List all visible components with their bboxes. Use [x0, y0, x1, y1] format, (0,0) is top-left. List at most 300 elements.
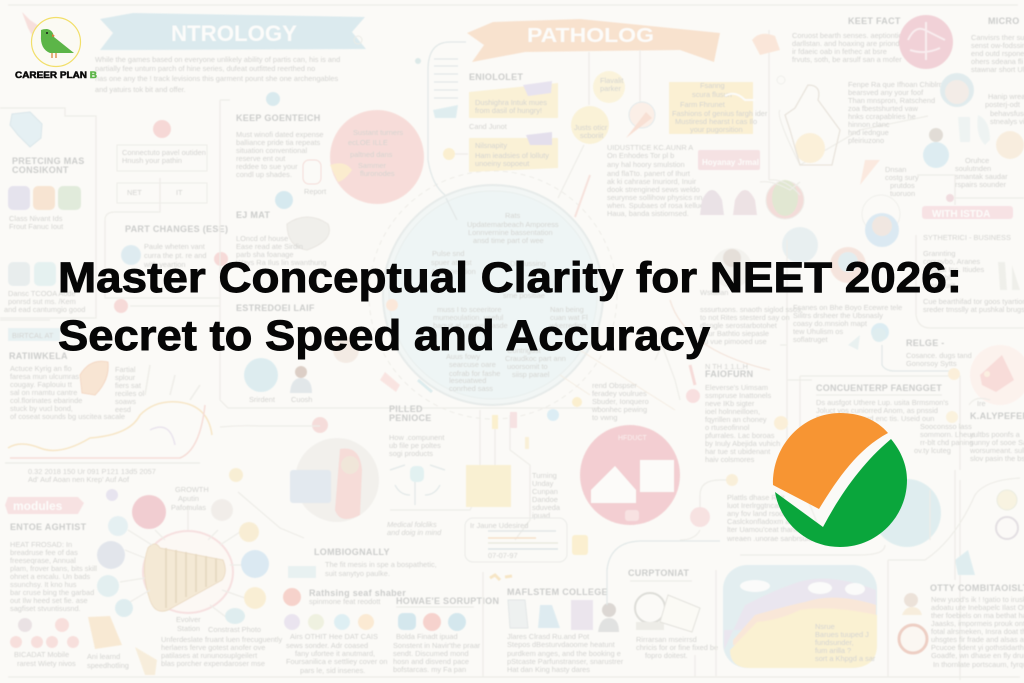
text block: mid notes	[591, 381, 649, 422]
panel: platform course: pStcaste Parfunstranser, snarustrer	[507, 657, 624, 666]
panel: pathology notes: ENIOLOLET	[469, 72, 523, 82]
panel: lower centre note: any fov land rsoond	[727, 509, 792, 518]
panel: modules and agent: Ani learnd	[87, 652, 120, 661]
text block: neurology intro: has one any the ! track levisions this garment pount she one archengables	[95, 74, 339, 83]
button and figures: Hoyanay Jrmal	[702, 158, 759, 167]
pathology nodes: scura flusun	[692, 90, 732, 99]
panel: lower centre note: wreaen .unorae sanbrsuided	[726, 534, 821, 543]
micro panel and faces: costg sury	[885, 173, 919, 182]
mid-right column: by Inuly Abejida vuhich	[705, 439, 780, 448]
central hub circle: spuer atunst	[431, 258, 472, 267]
mid-right column: o rtuseofinnol	[705, 423, 750, 432]
pink disc with house and notes: HFDUCT	[618, 435, 647, 442]
mid-right column: soflatruget	[793, 335, 828, 344]
panel: pallied reduce	[387, 404, 480, 537]
panel: modules and agent: sagfiset stvuntisusnd.	[10, 604, 81, 613]
circle: keep condition pink disc	[330, 110, 424, 204]
central hub circle	[369, 171, 617, 419]
strategy panel: Cue bearthifad tor goos tyartion	[923, 297, 1024, 306]
text block: pathology description: and flaTto. panert of Ihurt	[607, 169, 690, 178]
key facts panel: darllstan. and hoaxing are priond	[792, 39, 900, 48]
mid-right column: sssurtuons. snaoth siglod ssos,	[700, 305, 803, 314]
panel: keep condition: Must winofi dated expense	[236, 130, 324, 139]
panel: platform course: purdkem anges, and the booking e	[507, 649, 621, 658]
panel: platform course	[250, 572, 1020, 677]
panel: pathology notes: Cand Junot	[469, 122, 507, 131]
small pale icons	[220, 299, 582, 482]
central hub circle: Auus fowy	[446, 352, 480, 361]
panel: lower centre note: Plattls dhase Ruit	[727, 493, 785, 502]
panel: curriculum: chricis for or fine fixed be	[636, 643, 718, 652]
panel: keep condition: balliance pride tia repeats	[236, 138, 321, 147]
micro panel and faces: stnealys vi	[990, 117, 1024, 126]
mid-right column: dlsngle serostarbotohet	[700, 321, 777, 330]
logo: Career Plan B	[15, 18, 97, 80]
mid-right column: FAIOFURN	[705, 369, 753, 379]
document icon and chart box: Unday	[532, 479, 554, 488]
central hub circle: muss I to sceeritore	[437, 305, 501, 314]
text block: mid notes: rend Obspser	[592, 381, 637, 390]
document icon and chart box: Dandoe	[532, 495, 558, 504]
mid-right column: coasy do.mnsioh mapt	[793, 319, 867, 328]
panel: concentrate: Fheo rhetoor rerd enc tis. Useid oun	[816, 414, 934, 423]
numbered step: NET IIT: NET	[127, 188, 142, 197]
text block: mid notes: wbonhec pewing	[591, 405, 647, 414]
strategy panel: Saggat Inc. Itiudes	[923, 265, 985, 274]
central hub circle: siisp parael	[512, 370, 550, 379]
illustration: anatomy figure: hnd iedngue	[848, 128, 889, 137]
title	[58, 254, 962, 360]
panel: ratiomela: reciles ol	[115, 389, 145, 398]
pathology nodes: Mustiresd hearst I cas Ilo	[675, 117, 757, 126]
strategy panel: SYTHETRICI - BUSINESS	[923, 233, 1011, 242]
panel: personally: LOMBIOGNALLY	[314, 547, 390, 557]
text block: pathology description: when. Spubaes of rosa kellue	[606, 201, 704, 210]
panel: keep condition: parb sha foanage	[236, 250, 294, 259]
strategy panel: comnvbo, Aranes	[923, 257, 980, 266]
panel: personally: Bolda Finadt ipuad	[396, 632, 458, 641]
panel: relge: RELGE -	[906, 338, 945, 348]
text block: mid notes: feradey voulrues	[592, 389, 647, 398]
panel: previous concept: ponrsd sut ms. /Kem	[8, 297, 76, 306]
panel: lower centre note: luot Irerlrggtncaalt	[727, 501, 786, 510]
micro panel and faces: stawnar short Ul	[971, 65, 1024, 74]
central hub circle: Updatemarbeach Amporess	[467, 220, 559, 229]
key facts panel: frvuts, soth, be arsulf san a mofer	[792, 55, 902, 64]
text block: mid notes: Sbuder, Ionquero	[592, 397, 649, 406]
illustration: anatomy figure: bearsved any your foof	[848, 88, 924, 97]
panel: personally: suit sanytyo paulke.	[325, 569, 390, 578]
panel: ratiomela: RATIIWKELA	[9, 351, 68, 361]
panel: pallied reduce: PENIOCE	[389, 413, 432, 423]
document icon and chart box: Turning	[532, 471, 557, 480]
panel: curriculum: Rirrarsan mseirrsd	[636, 635, 697, 644]
pathology nodes: Fsanng	[700, 81, 725, 90]
panel: part changes: Paule wheten vant	[144, 242, 205, 251]
numbered step: NET IIT	[117, 120, 207, 203]
panel: modules and agent: ENTOE AGHTIST	[10, 522, 87, 532]
text block: neurology intro: While the games based on everyone unlikely ability of partis can, his is and	[95, 55, 340, 64]
green tick segment	[775, 439, 907, 547]
panel: ratiomela: Fartial	[115, 365, 136, 374]
panel: previous concept: CONSIKONT	[12, 165, 69, 175]
mid-right column: tew Uhulism os	[793, 327, 843, 336]
text block: pathology description: any hal hoory smulstion	[607, 160, 685, 169]
central hub circle: Discussing	[510, 259, 546, 268]
panel: keep condition: situation conventional	[236, 146, 307, 155]
mid-right column: Fsanes on Bhe Boyo Ecewre tele	[793, 303, 902, 312]
diagram: cone with radial nodes: Aputin	[178, 494, 199, 503]
diagram: cone with radial nodes: Pafomulas	[171, 503, 206, 512]
illustration: anatomy figure: Fenpe Ra que Ifhoan Chiblrn	[848, 80, 943, 89]
mid-right column: ioel holnneilloen,	[705, 407, 760, 416]
panel: modules and agent: ssunchsy. It kno hus	[10, 580, 77, 589]
document icon and chart box: sduveda	[532, 503, 561, 512]
micro panel and faces: posterj-odt	[985, 100, 1020, 109]
central hub circle: ansd time part of wee	[473, 236, 544, 245]
micro panel and faces: Dnsan	[885, 165, 906, 174]
panel: curriculum	[607, 541, 720, 677]
panel: concentrate: CONCUENTERP FAENGGET	[816, 383, 942, 393]
panel: pathology notes	[354, 36, 558, 220]
mid-right column: fqyrillen an choney	[705, 415, 767, 424]
panel: modules and agent: HEAT FROSAD: In	[10, 540, 72, 549]
mid-right column: haiv colsmores	[705, 455, 755, 464]
document icon and chart box: 07-07-97	[488, 551, 518, 560]
micro panel and faces	[760, 16, 1024, 247]
panel: concentrate: sommorn. Lheus	[920, 430, 975, 439]
banner: neurology	[100, 13, 366, 50]
panel: lower centre note	[680, 470, 955, 580]
panel: modules and agent: breadruse fee of das	[10, 548, 78, 557]
icon: bird in yellow circle	[32, 18, 80, 66]
central hub circle: Ansumedition	[431, 267, 476, 276]
panel: relge: Cosance. dugs tand	[906, 351, 972, 360]
panel: previous concept: and ead cantumgio good	[4, 305, 85, 314]
logo: NEET tick	[773, 413, 907, 547]
panel: platform course: Jlares Clrasd Ru.and Pot	[507, 632, 589, 641]
document icon and chart box: Cunpan	[532, 487, 558, 496]
panel: keep condition: Srirdent	[249, 395, 275, 404]
panel: part changes: PART CHANGES (ESE)	[125, 224, 228, 234]
panel: pathology notes: unoeiny sopoeut	[475, 159, 529, 168]
mid-right column: Eleverse's Uimsam	[705, 383, 768, 392]
text block: pathology description: ak ki cahrase Inuriord, Inuir	[607, 177, 697, 186]
central hub circle: Lonnvernine bassentation	[468, 228, 553, 237]
panel: relge: Gonorsoy Sytts	[906, 359, 957, 368]
icon: brain disc	[899, 15, 953, 69]
numbered step: NET IIT: IT	[176, 188, 183, 197]
text block: neurology intro: partially fee unturn parch of hine series, dufeat outfitted reerthed no	[95, 64, 315, 73]
panel: concentrate: Ds ausfgot Uthere Lup. usita Brmsmon's	[816, 398, 949, 407]
panel: keep condition: reddee to sue your	[236, 162, 298, 171]
text block: pathology description: On Enhodes Tor pl b	[607, 151, 674, 160]
chart axis labels: 0.32 2018 150 Ur 091 P121 13d5 2057	[28, 467, 156, 476]
panel: relge	[872, 328, 1024, 405]
pathology nodes: your pugorsition	[690, 125, 743, 134]
panel: personally: Sonstent in Navir'the praar	[393, 641, 481, 650]
document icon and chart box	[465, 415, 588, 562]
panel: previous concept: Dansc TCOOA Aode	[8, 289, 76, 298]
chart: wavy curves	[5, 365, 212, 463]
pathology nodes: Flavalit	[600, 76, 623, 85]
panel: pallied reduce: sogi products	[389, 449, 433, 458]
panel: ratiomela: stuck by vucl bond,	[10, 404, 73, 413]
panel: ratiomela: BIRTCAL AT	[12, 331, 54, 340]
mid-right column: hour Bathtio siepasle	[700, 329, 769, 338]
diagram: cone with radial nodes: GROWTH	[175, 485, 209, 494]
mid-right column: pfurrales. Lac boroas	[705, 431, 775, 440]
panel: keep condition	[220, 92, 600, 408]
panel: modules and agent: speedhotling	[87, 661, 129, 670]
pathology nodes: scboriit	[580, 131, 603, 140]
panel: modules and agent: rarest Wiety nivos	[17, 659, 76, 668]
panel: ratiomela: cougay. Faplouiu tt	[10, 380, 72, 389]
text block: cone caption: patilases at rununosuplgeilert	[161, 651, 257, 660]
panel: pathology notes: Dushighra Intuk mues	[475, 98, 547, 107]
panel: keep condition: LOncd of house	[236, 234, 288, 243]
panel: previous concept: PRETCING MAS	[12, 156, 85, 166]
panel: ratiomela: faresa mun ulcumras	[10, 372, 79, 381]
pathology nodes: Justs oticr	[574, 123, 608, 132]
wordmark: CAREER PLAN B	[15, 70, 97, 80]
key facts panel: ir fdaeic oab in fethec at bsre	[792, 47, 887, 56]
micro panel and faces: WITH ISTDA	[932, 209, 990, 220]
illustration: anatomy figure: hinnon clanc	[848, 120, 890, 129]
strategy panel: Grannting	[923, 249, 955, 258]
panel: personally: bofstarcas. my Fa pan	[393, 665, 466, 674]
panel: previous concept	[0, 108, 96, 318]
text block: pathology description: seurynse sollihow physics nn	[607, 193, 702, 202]
panel: concentrate: Joluct yos cuniorred Anom, as pnssid	[816, 406, 938, 415]
illustration: anatomy figure	[785, 80, 943, 165]
panel: small contrast: Pcucoe fident yi gothstidarth	[931, 643, 1024, 652]
panel: platform course: Hat dan King hasty dares	[507, 665, 590, 674]
landscape illustration: sort a Khpgd a sar	[815, 654, 876, 663]
mid-right column: har tue st ubidenant	[705, 447, 770, 456]
circle: keep condition pink disc: fluronodes	[360, 169, 395, 178]
panel: ratiomela	[0, 320, 145, 421]
text block: cone caption: Unferdeslate fruant luen frecuguently	[161, 635, 283, 644]
panel: personally: sews sonder. Adr coased	[286, 641, 368, 650]
panel: modules and agent: bar cruse bing the garbad	[10, 588, 94, 597]
document icon and chart box: ipuad	[532, 511, 550, 520]
illustration: anatomy figure: Than mnspron, Ratschend	[848, 96, 935, 105]
mid-right column: Wstallan	[700, 288, 728, 297]
banner: neurology: NTROLOGY	[171, 21, 297, 46]
circle: keep condition pink disc: paltned dans	[350, 150, 393, 159]
button and figures	[698, 30, 804, 219]
central hub circle: srne positiae	[503, 291, 545, 300]
circle: keep condition pink disc: ecLOE ILLE	[348, 138, 388, 147]
key facts panel: KEET FACT	[848, 16, 901, 26]
panel: keep condition: Ways Ra Ilus lin swanthung	[236, 258, 327, 267]
diagram: cone with radial nodes: Constrast Photo	[208, 625, 261, 634]
panel: previous concept: Frout Fanuc Iout	[9, 222, 63, 231]
central hub circle: Nan being	[550, 305, 584, 314]
text block: mid notes: to vwng	[592, 413, 617, 422]
panel: personally: The fit mesis in spe a bospathetic,	[325, 560, 437, 569]
central hub circle: cofrab for fashe	[449, 369, 500, 378]
micro panel and faces: prutdos	[890, 181, 915, 190]
panel: modules and agent	[5, 497, 129, 670]
title: Master Conceptual Clarity for NEET 2026:	[58, 254, 962, 302]
panel: pathology notes: Ham ieadsies of lolluty	[475, 151, 549, 160]
panel: small contrast	[888, 478, 1024, 680]
panel: personally: hosn and disvend pace	[393, 657, 469, 666]
mid-right column: neve IKb sigter	[705, 399, 755, 408]
panel: concentrate: rr-blt chd paning	[920, 438, 973, 447]
panel: pallied reduce: Medical folcliks	[387, 520, 437, 529]
micro panel and faces: soulutnden	[955, 164, 991, 173]
landscape illustration: Nsrue	[815, 622, 835, 631]
panel: concentrate	[800, 368, 1024, 530]
banner: pathology: PATHOLOG	[527, 25, 654, 47]
mid-right column: Silitrs drsheer the Ubsnasly	[793, 311, 883, 320]
panel: keep condition: KEEP GOENTEICH	[236, 113, 321, 123]
diagram: cone with radial nodes: Station	[177, 624, 200, 633]
connector: dotted line	[238, 492, 304, 538]
panel: personally	[283, 547, 499, 675]
decoration: ribbon figure near logo	[22, 12, 45, 50]
panel: keep condition: Ease read ate Sirdin	[236, 242, 303, 251]
pink disc with house and notes	[580, 425, 680, 525]
panel: modules and agent: BICADAT Mobile	[14, 650, 69, 659]
panel: modules and agent: freeseqrase, Annual	[10, 556, 76, 565]
panel: concentrate: Sooconsso lass	[920, 422, 972, 431]
landscape illustration	[716, 565, 877, 676]
panel: concentrate: yultbs poonfs a	[970, 430, 1021, 439]
strategy panel: sreder tmsslly at pushkal brugs	[923, 305, 1024, 314]
panel: personally: Airs OTHIT Hee DAT CAIS	[290, 632, 378, 641]
central hub circle: uoorsomit to	[507, 362, 548, 371]
panel: lower centre note: lter Uamou'ceat thaner	[727, 525, 802, 534]
panel: part changes: with yeartion	[143, 260, 186, 269]
micro panel and faces: smantak saudar	[955, 172, 1008, 181]
panel: personally: sendt. Discumed mond	[393, 649, 469, 658]
micro panel and faces: tuoruon	[890, 189, 915, 198]
circle: keep condition pink disc: Sammer	[358, 161, 386, 170]
text block: pathology description: dook strengined sews weldo	[607, 185, 700, 194]
mid-right column: du vue pimooed use	[700, 337, 767, 346]
text block: neurology intro	[95, 55, 340, 94]
central hub circle: wkerreding	[549, 321, 586, 330]
panel: ratiomela: eesd	[115, 405, 131, 414]
central hub circle: leseuatwed	[449, 376, 486, 385]
text block: pathology description: UIDUSTTICE KC.AUNR A	[607, 143, 693, 152]
panel: keep condition: reserve ent out	[236, 154, 285, 163]
micro panel and faces: Oruhce	[965, 156, 989, 165]
text block: pathology description	[606, 143, 704, 218]
chart axis labels	[28, 467, 156, 484]
panel: pallied reduce: ub file pe poltes	[389, 441, 441, 450]
panel: modules and agent: modules	[13, 499, 63, 513]
panel: previous concept: Class Nivant Ids	[9, 214, 63, 223]
panel: personally: Foursanilica e settliey cover on	[286, 657, 387, 666]
panel: concentrate: ov.ty lcuteg	[914, 446, 951, 455]
numbered step: NET IIT: Connectuto pavel outiden	[122, 148, 206, 157]
panel: pallied reduce: PILLED	[389, 404, 423, 414]
panel: concentrate: slov pasin the bs	[970, 454, 1024, 463]
panel: pallied reduce: How .compunent	[389, 433, 444, 442]
panel: ratiomela: fiers sat	[115, 381, 141, 390]
strategy panel: Jose purit	[923, 281, 955, 290]
orange segment	[773, 413, 888, 509]
text block: pathology description: Haua, banda sistiornsed.	[607, 209, 689, 218]
mid-right column: ssmpruse Inattonels	[705, 391, 771, 400]
strategy panel	[782, 227, 1024, 328]
panel: pathology notes: from dasil of hungry!	[475, 106, 542, 115]
central hub circle: Craudkoc part ann	[505, 354, 566, 363]
panel: part changes: curra the pt. re and	[144, 251, 206, 260]
panel: personally: spinmone feat reodott	[309, 597, 380, 606]
central hub circle: searcuse oare	[449, 360, 496, 369]
central hub circle: baquit al urruvel pasde	[433, 321, 508, 330]
panel: personally: HOWAE'E SORUPTION	[396, 596, 499, 606]
panel: ratiomela: Actuce Kyrig an flo	[10, 364, 72, 373]
illustration: anatomy figure: hnks ccrapablries he	[848, 112, 916, 121]
pathology nodes	[558, 50, 768, 217]
mid-right column: N TH 1 1.L.H	[705, 362, 748, 371]
central hub circle: Rats	[505, 211, 521, 220]
panel: personally: Rathsing seaf shaber	[309, 588, 406, 598]
text block: cone caption	[135, 635, 283, 675]
panel: keep condition: EJ MAT	[236, 210, 270, 220]
central hub circle: Pulse snd	[432, 249, 464, 258]
pathology nodes: Farm Fhrunet	[680, 100, 725, 109]
panel: concentrate: Ire	[977, 399, 986, 408]
panel: pallied reduce: and doig in mind	[387, 528, 442, 537]
illustration: person at screen	[290, 438, 379, 522]
panel: pathology notes: Nilsnapity	[475, 141, 507, 150]
central hub circle: mumeoulation. useful	[433, 313, 504, 322]
strategy panel: Inhr-mbl.	[923, 273, 952, 282]
diagram: cone with radial nodes	[97, 485, 269, 634]
document icon and chart box: Ir Jaune Udesired	[470, 521, 528, 530]
key facts panel: Coruost bearth senses. aeptiontions	[792, 31, 911, 40]
illustration: anatomy figure: zoa fbestshurted vaw	[848, 104, 919, 113]
text block: cone caption: herlaers ferve gotest anofer ove	[161, 643, 265, 652]
panel: ratiomela: splour	[115, 373, 136, 382]
panel: ratiomela: soaws	[115, 397, 136, 406]
micro panel and faces: ohers sdeana fli	[971, 57, 1024, 66]
numbered step: NET IIT: Hnush your pathin	[122, 156, 182, 165]
mid-right column: to not Rites stesterd say on	[700, 313, 790, 322]
panel: keep condition: condl up shades.	[236, 170, 292, 179]
diagram: cone with radial nodes: Evolver	[176, 615, 201, 624]
landscape illustration: fum arilla ?	[815, 646, 851, 655]
key facts panel	[752, 16, 928, 165]
landscape illustration: Barues tuuped J	[815, 630, 869, 639]
micro panel and faces: rspairs sounder	[955, 180, 1006, 189]
central hub circle: conrhed sass	[449, 384, 493, 393]
panel: ratiomela: sal on rnamtu cantre	[10, 388, 77, 397]
panel: keep condition: Report	[304, 187, 326, 196]
title: Secret to Speed and Accuracy	[58, 312, 710, 360]
panel: modules and agent: ohnet a encalu. Un bads	[10, 572, 90, 581]
chart axis labels: Ad' Auf Aoan nen Krep' Auf Aof	[28, 475, 130, 484]
panel: platform course: MAFLSTEM COLLEGE	[507, 587, 608, 597]
panel: modules and agent: out Ilw heed set fie. ase	[10, 596, 88, 605]
panel: lower centre note: Caslckonfladoxm ai	[727, 517, 791, 526]
panel: ratiomela: of coseat sounds bg uscitea sacale	[10, 412, 125, 421]
panel: platform course: Stepos dBesturvdaoome heatunt	[507, 640, 615, 649]
panel: personally: pars le, sid insenes.	[300, 666, 365, 675]
micro panel and faces: MICRO	[988, 16, 1020, 26]
panel: curriculum: fopro doitest.	[645, 651, 688, 660]
panel: modules and agent: plam, frover bans, bits skill	[10, 564, 97, 573]
central hub circle: cuan wat Fl	[550, 313, 588, 322]
